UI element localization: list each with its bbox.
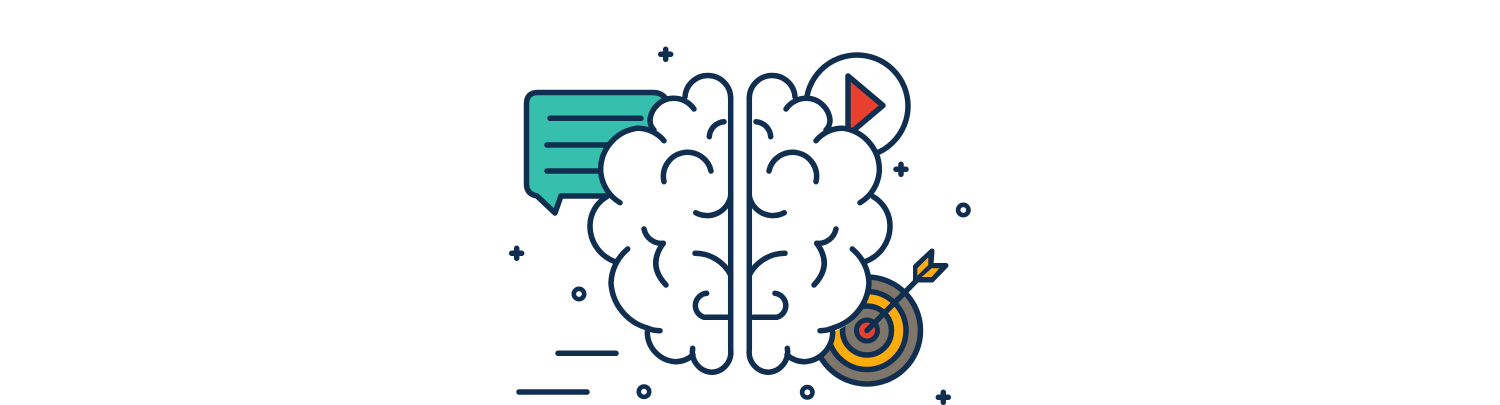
motion lines bbox=[519, 353, 616, 392]
brain: left hemisphere bbox=[590, 75, 731, 372]
icon: speech bubble bbox=[526, 92, 667, 213]
icon: play button bbox=[806, 55, 908, 157]
brain: right hemisphere bbox=[749, 75, 890, 372]
icon: target with arrow bbox=[814, 251, 946, 384]
decorative plus signs bbox=[512, 49, 948, 402]
decorative small circles bbox=[574, 205, 968, 397]
